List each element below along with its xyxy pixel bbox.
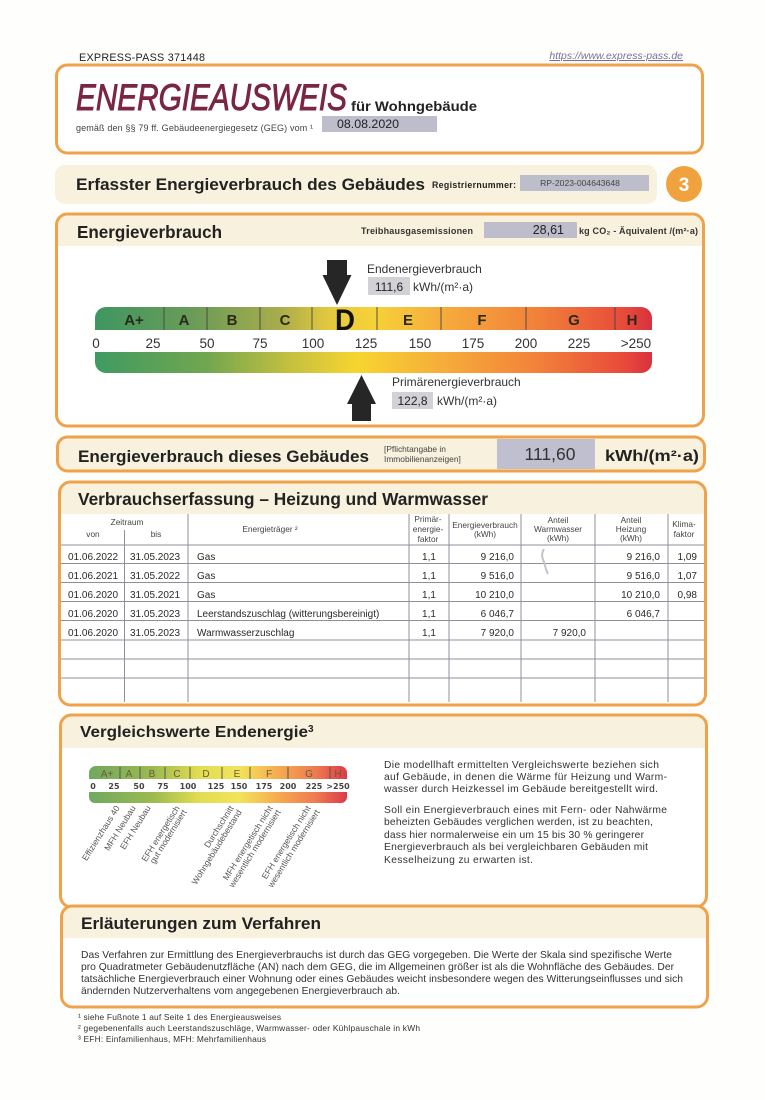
table header: (kWh) [547, 533, 569, 543]
table row 3: 0,98 [678, 590, 697, 601]
consumption heading: Energieverbrauch dieses Gebäudes [78, 447, 369, 466]
efficiency class bar: C [280, 312, 291, 329]
small class bar: A [126, 769, 133, 780]
comparison text: Die modellhaft ermittelten Vergleichswerte beziehen sich [384, 760, 659, 771]
table row 4: 1,1 [422, 609, 436, 620]
small scale numbers: 100 [180, 782, 197, 791]
rotated building labels [80, 803, 322, 890]
footnote mark: 3 [308, 724, 314, 735]
table row 5: 01.06.2020 [68, 628, 118, 639]
table row 4 [68, 609, 660, 620]
table row 2: 31.05.2022 [130, 571, 180, 582]
panel heading: Energieverbrauch [77, 222, 222, 242]
scale numbers: 175 [462, 336, 484, 351]
table row 4: Leerstandszuschlag (witterungsbereinigt) [197, 609, 379, 620]
table row 2: 01.06.2021 [68, 571, 118, 582]
comparison heading: Vergleichswerte Endenergie [80, 724, 308, 741]
scale numbers: 100 [302, 336, 324, 351]
final energy value: 111,6 [375, 280, 403, 294]
table row 3: Gas [197, 590, 215, 601]
primary energy value: 122,8 [397, 394, 428, 408]
date field: 08.08.2020 [337, 117, 399, 131]
footnotes [78, 1012, 420, 1044]
table row 3 [68, 590, 697, 601]
rotated building labels: wesentlich modernisiert [226, 807, 283, 890]
table header: faktor [418, 534, 439, 544]
header link: https://www.express-pass.de [549, 50, 683, 62]
table row 5 [68, 628, 586, 639]
table header: Primär- [414, 514, 442, 524]
table row 5: 7 920,0 [553, 628, 586, 639]
table row 2: 9 516,0 [481, 571, 514, 582]
scale numbers: >250 [621, 336, 651, 351]
scale numbers: 25 [145, 336, 161, 351]
table row 4: 01.06.2020 [68, 609, 118, 620]
small scale numbers: 25 [108, 782, 120, 791]
small class bar: B [149, 769, 156, 780]
table heading: Verbrauchserfassung – Heizung und Warmwasser [78, 489, 488, 509]
table row 2: 1,1 [422, 571, 436, 582]
rotated building labels: Wohngebäudebestand [189, 808, 244, 886]
rotated building labels: EFH energetisch nicht [259, 803, 313, 881]
rotated building labels: Durchschnitt [202, 803, 236, 850]
footnotes: ² gegebenenfalls auch Leerstandszuschläge, Warmwasser- oder Kühlpauschale in kWh [78, 1023, 420, 1033]
emissions label: Treibhausgasemissionen [361, 226, 473, 236]
table header: Warmwasser [534, 524, 582, 534]
table row 5: 31.05.2023 [130, 628, 180, 639]
small scale numbers: 125 [208, 782, 225, 791]
small scale numbers: 75 [157, 782, 169, 791]
comparison text: auf Gebäude, in denen die Wärme für Heizung und Warm- [384, 772, 667, 783]
efficiency class bar: G [568, 312, 580, 329]
table row 3: 31.05.2021 [130, 590, 180, 601]
consumption unit: kWh/(m²·a) [605, 448, 699, 465]
table header: Energieträger ² [242, 524, 298, 534]
scale numbers: 200 [515, 336, 537, 351]
efficiency class bar: A [179, 312, 190, 329]
rotated building labels: gut modernisiert [148, 807, 189, 865]
consumption value: 111,60 [525, 444, 576, 464]
small class bar: E [234, 769, 241, 780]
table header: (kWh) [474, 529, 496, 539]
footnotes: ³ EFH: Einfamilienhaus, MFH: Mehrfamilienhaus [78, 1034, 266, 1044]
efficiency class bar: F [477, 312, 487, 329]
mandatory note [384, 444, 461, 464]
rotated building labels: EFH energetisch [139, 804, 182, 863]
table row 3: 10 210,0 [621, 590, 660, 601]
panel: building consumption [58, 437, 704, 471]
table header: Klima- [672, 519, 696, 529]
small scale numbers: 150 [231, 782, 248, 791]
table header: (kWh) [620, 533, 642, 543]
small gradient bar [89, 792, 347, 803]
small class bar: D [202, 769, 210, 780]
table header [86, 514, 696, 544]
table row 2: 1,07 [678, 571, 697, 582]
table row 5: Warmwasserzuschlag [197, 628, 294, 639]
primary energy label: Primärenergieverbrauch [392, 375, 521, 389]
rotated building labels: MFH Neubau [102, 804, 138, 852]
small class bar: F [266, 769, 272, 780]
table row 2 [68, 571, 697, 582]
scale numbers: 50 [199, 336, 215, 351]
registration label: Registriernummer: [432, 180, 516, 190]
table header: Anteil [548, 515, 569, 525]
arrow: primary energy [347, 375, 376, 421]
panel: comparison values [60, 715, 706, 907]
comparison text: wasser durch Heizkessel im Gebäude bereitgestellt wird. [383, 784, 658, 795]
comparison text: dass hier normalerweise ein um 15 bis 30 % geringerer [384, 830, 645, 841]
table row 1: 31.05.2023 [130, 552, 180, 563]
comparison text [383, 760, 667, 866]
small class bar: C [173, 769, 181, 780]
table row 4: 6 046,7 [481, 609, 514, 620]
comparison text: Energieverbrauch als bei vergleichbaren Gebäuden mit [384, 842, 648, 853]
scale numbers: 150 [409, 336, 431, 351]
efficiency class bar: D [335, 304, 355, 337]
scale numbers: 75 [252, 336, 268, 351]
explanation text: tatsächliche Energieverbrauch einer Wohnung oder eines Gebäudes weicht insbesondere wegen des Witterungseinflusses und sich [81, 974, 683, 985]
table row 3: 01.06.2020 [68, 590, 118, 601]
scale numbers: 125 [355, 336, 377, 351]
table row 5: 1,1 [422, 628, 436, 639]
table header: Energieverbrauch [452, 520, 518, 530]
arrow: final energy [322, 260, 352, 305]
main title: ENERGIEAUSWEIS [76, 77, 347, 118]
panel: title [56, 65, 702, 153]
table header: energie- [413, 524, 443, 534]
registration number [520, 175, 649, 191]
primary energy gradient bar [95, 352, 652, 373]
registration number: RP-2023-004643648 [540, 178, 620, 188]
emissions unit: kg CO₂ - Äquivalent /(m²·a) [579, 226, 698, 236]
rotated building labels: Effizienzhaus 40 [80, 804, 122, 862]
explanation text: pro Quadratmeter Gebäudenutzfläche (AN) nach dem GEG, die im Allgemeinen größer ist als die Wohnfläche des Gebäudes. Der [81, 962, 675, 973]
table row 1: 01.06.2022 [68, 552, 118, 563]
table row 1 [68, 552, 697, 563]
table row 3: 1,1 [422, 590, 436, 601]
efficiency class bar: A+ [124, 312, 144, 329]
small class bar: H [334, 769, 342, 780]
table row 4: 6 046,7 [627, 609, 660, 620]
efficiency class bar: H [627, 312, 637, 329]
small class bar: A+ [101, 769, 113, 780]
small scale numbers [90, 782, 350, 791]
table row 1: Gas [197, 552, 215, 563]
legal line: gemäß den §§ 79 ff. Gebäudeenergiegesetz (GEG) vom ¹ [76, 123, 313, 133]
panel: energy consumption [56, 214, 704, 426]
emissions value [484, 222, 577, 238]
scale numbers: 0 [92, 336, 100, 351]
comparison text: Kesselheizung zu erwarten ist. [384, 855, 533, 866]
small scale numbers: 50 [133, 782, 145, 791]
table header: von [86, 529, 100, 539]
panel: explanation [62, 906, 708, 1007]
primary energy value [392, 392, 497, 409]
primary energy value: kWh/(m²·a) [437, 394, 497, 408]
date field [322, 116, 437, 132]
header id: EXPRESS-PASS 371448 [79, 52, 205, 64]
comparison text: Soll ein Energieverbrauch eines mit Fern- oder Nahwärme [384, 805, 667, 816]
small scale numbers: 200 [280, 782, 297, 791]
table header: Heizung [616, 524, 647, 534]
table row 2: 9 516,0 [627, 571, 660, 582]
panel: section heading [55, 165, 657, 204]
table row 1: 9 216,0 [481, 552, 514, 563]
table header: bis [151, 529, 161, 539]
final energy value [368, 277, 473, 295]
rotated building labels: MFH energetisch nicht [221, 803, 275, 882]
scale numbers: 225 [568, 336, 590, 351]
efficiency class bar [95, 304, 652, 337]
rotated building labels: EFH Neubau [118, 804, 153, 851]
comparison text: beheizten Gebäudes verglichen werden, ist zu beachten, [384, 817, 653, 828]
table row 1: 1,09 [678, 552, 697, 563]
rotated building labels: wesentlich modernisiert [265, 807, 322, 890]
table row 5: 7 920,0 [481, 628, 514, 639]
final energy value: kWh/(m²·a) [413, 280, 473, 294]
explanation text: Das Verfahren zur Ermittlung des Energieverbrauchs ist durch das GEG vorgegeben. Die Werte der Skala sind spezifische Werte [81, 950, 672, 961]
efficiency class bar: B [227, 312, 238, 329]
mandatory note: [Pflichtangabe in [384, 444, 446, 454]
emissions value: 28,61 [533, 223, 564, 237]
explanation text [81, 950, 683, 997]
table row 3: 10 210,0 [475, 590, 514, 601]
small scale numbers: >250 [326, 782, 350, 791]
explanation text: ändernden Nutzerverhaltens vom angegebenen Energieverbrauch ab. [81, 986, 400, 997]
small class bar: G [305, 769, 313, 780]
panel: consumption table [60, 482, 706, 705]
small scale numbers: 175 [256, 782, 273, 791]
table grid [61, 514, 704, 702]
table header: Zeitraum [111, 517, 143, 527]
table row 2: Gas [197, 571, 215, 582]
subtitle: für Wohngebäude [351, 98, 477, 114]
table header: faktor [674, 529, 695, 539]
footnotes: ¹ siehe Fußnote 1 auf Seite 1 des Energieausweises [78, 1012, 281, 1022]
final energy label: Endenergieverbrauch [367, 262, 482, 276]
consumption value [497, 439, 595, 469]
small scale numbers: 225 [306, 782, 323, 791]
explanation heading: Erläuterungen zum Verfahren [81, 915, 321, 933]
table header: Anteil [621, 515, 642, 525]
small scale numbers: 0 [90, 782, 96, 791]
efficiency class bar: E [403, 312, 413, 329]
section title: Erfasster Energieverbrauch des Gebäudes [76, 175, 425, 194]
small class bar [89, 766, 347, 780]
table row 1: 9 216,0 [627, 552, 660, 563]
scale numbers [92, 336, 651, 351]
badge: page number: 3 [679, 175, 689, 196]
mandatory note: Immobilienanzeigen] [384, 454, 461, 464]
badge: page number [666, 166, 702, 202]
table row 4: 31.05.2023 [130, 609, 180, 620]
table row 1: 1,1 [422, 552, 436, 563]
